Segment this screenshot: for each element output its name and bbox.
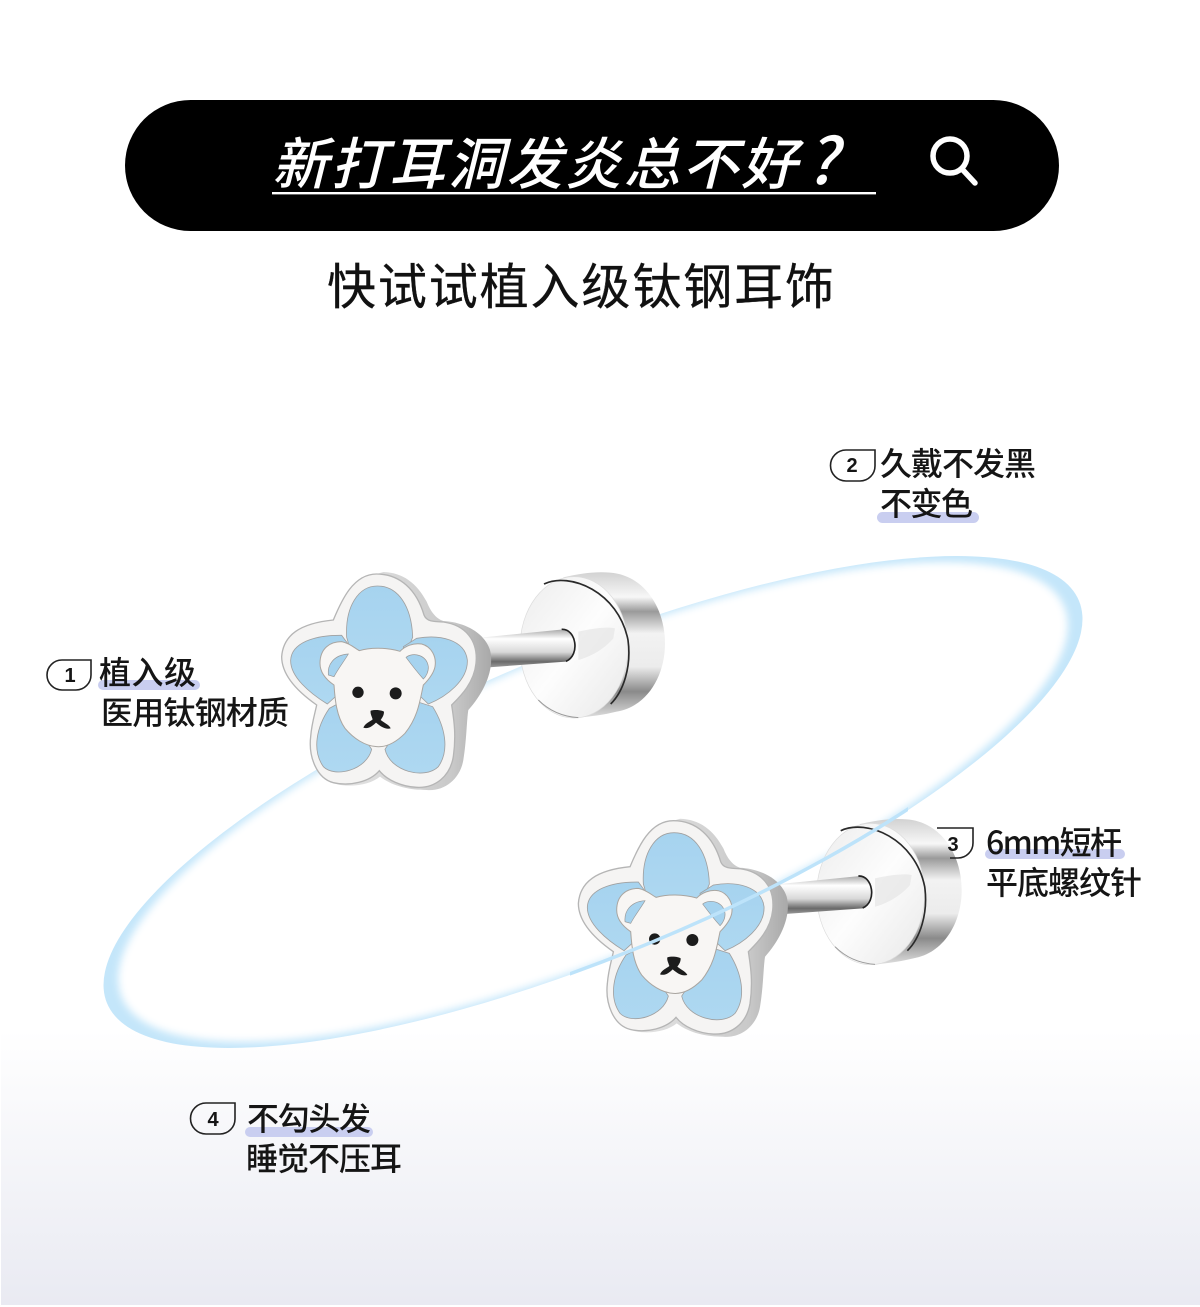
earring back cap rim: [860, 819, 962, 964]
flower side: [630, 819, 788, 1037]
bear nose and mouth: [660, 957, 687, 975]
icon: magnifier: [933, 139, 975, 183]
callout 4: 不勾头发: 睡觉不压耳: [246, 1134, 402, 1180]
badge 4: [190, 1103, 235, 1134]
headline underline: [272, 192, 876, 194]
badge 3: 3: [947, 834, 959, 856]
bear head: [320, 642, 435, 747]
blue enamel petals: [587, 833, 764, 1020]
badge 3: [937, 828, 973, 858]
badge 2: [830, 450, 875, 481]
search bar headline: [125, 100, 1059, 231]
callout 1: 植入级: [47, 648, 289, 734]
callout text: 不勾头发: [247, 1094, 371, 1140]
subtitle: 快试试植入级钛钢耳饰: [327, 248, 834, 319]
callout 4: 不勾头发: 4: [207, 1109, 219, 1131]
callout 2: 久戴不发黑: 不变色: [880, 479, 973, 525]
earring back disc: [520, 577, 628, 718]
bear eyes: [649, 933, 660, 945]
headline text: 新打耳洞发炎总不好: [272, 120, 804, 201]
callout 1: 植入级: 1: [64, 665, 76, 687]
highlight bar: [98, 680, 200, 690]
bear eyes: [352, 687, 364, 698]
callout 3: 6mm短杆: 平底螺纹针: [986, 858, 1142, 904]
callout text: 久戴不发黑: [880, 439, 1036, 485]
flower side: [333, 572, 491, 790]
earring back disc: [817, 823, 925, 965]
highlight bar: [877, 512, 979, 523]
bear head: [617, 888, 732, 993]
callout text: 6mm短杆: [986, 818, 1122, 864]
callout 2: 久戴不发黑: [830, 439, 1036, 525]
earring post: [483, 629, 575, 667]
earring back cap rim: [563, 572, 665, 718]
blue enamel petals: [291, 586, 467, 773]
callout 4: 不勾头发: [190, 1094, 402, 1180]
bear ears: [625, 901, 645, 923]
badge 1: [47, 660, 91, 690]
search bar pill: [125, 100, 1059, 231]
bear nose and mouth: [363, 710, 391, 729]
orbit ring front arc over earring 2: [570, 807, 908, 976]
callout 3: 6mm短杆: [985, 818, 1142, 904]
headline text: ?: [806, 111, 846, 203]
bear ears: [328, 654, 348, 677]
callout 1: 植入级: 医用钛钢材质: [101, 688, 289, 734]
flower face: [578, 821, 773, 1034]
orbit ring behind earrings: [104, 556, 1082, 1048]
callout text: 植入级: [99, 648, 196, 694]
callout 2: 久戴不发黑: 2: [846, 455, 858, 477]
earring 1: [282, 572, 665, 790]
highlight bar: [245, 1127, 373, 1137]
flower face: [282, 574, 476, 787]
highlight bar: [985, 849, 1125, 859]
earring 2: [578, 819, 962, 1037]
earring post: [780, 876, 872, 914]
